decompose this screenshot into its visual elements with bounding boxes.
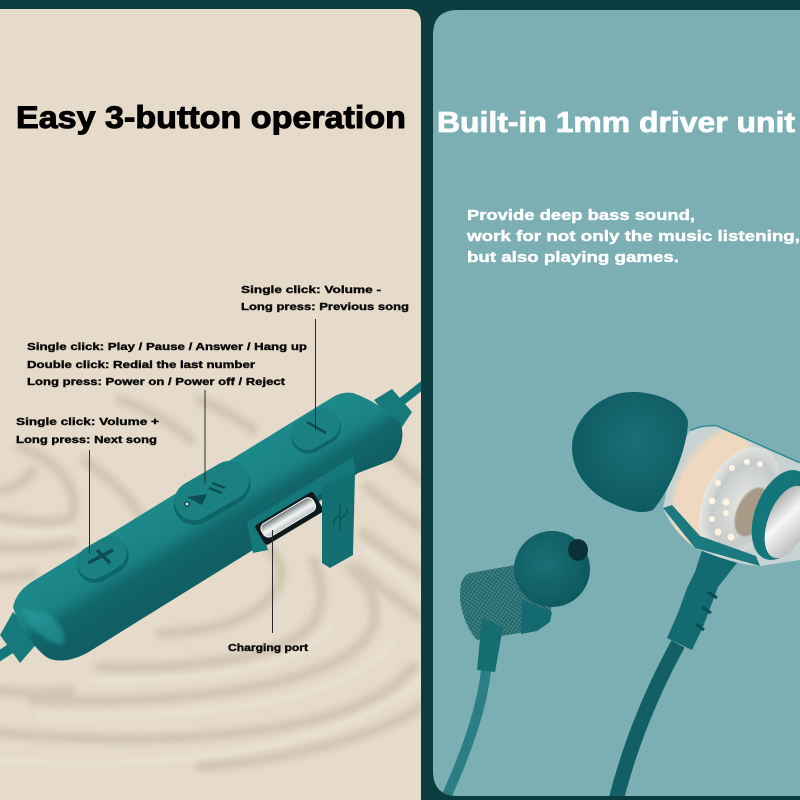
label: volume up: Long press: Next song	[16, 434, 157, 446]
ear tip hole	[568, 539, 588, 561]
small earphone	[447, 531, 590, 795]
strain relief ridges	[696, 592, 717, 630]
small ear tip	[514, 531, 590, 607]
label: volume down	[241, 284, 409, 313]
strain relief	[667, 547, 737, 650]
description	[466, 207, 800, 266]
label: play pause: Double click: Redial the last number	[27, 359, 255, 371]
button: play pause	[174, 460, 250, 525]
description: but also playing games.	[467, 249, 679, 266]
title: Easy 3-button operation	[16, 99, 406, 135]
large earphone	[572, 392, 800, 800]
large cable	[616, 644, 678, 800]
panel: driver unit	[433, 10, 800, 800]
USB cover tab	[322, 472, 355, 568]
button: minus	[291, 408, 341, 454]
leader line: volume up	[89, 450, 90, 554]
panel: 3-button operation	[0, 9, 424, 800]
leader line: charging port	[272, 530, 273, 633]
meshed body	[460, 565, 552, 640]
cable: left	[0, 645, 13, 662]
end cap rim	[752, 470, 800, 560]
peach coil	[670, 430, 752, 548]
label: charging port: Charging port	[228, 642, 309, 654]
small strain relief	[477, 618, 503, 672]
title: Built-in 1mm driver unit	[437, 107, 795, 139]
label: volume up: Single click: Volume +	[16, 416, 159, 428]
lit end highlight	[20, 608, 64, 645]
leader line: play pause	[204, 390, 206, 484]
label: play pause: Single click: Play / Pause / Answer / Hang up	[27, 341, 307, 353]
glowing dots	[708, 459, 763, 540]
large ear tip	[572, 392, 688, 512]
remote body	[13, 393, 402, 661]
cable collars	[0, 389, 412, 663]
small cable	[447, 670, 486, 795]
cable: right	[400, 381, 421, 404]
neck	[521, 600, 552, 634]
label: volume down: Single click: Volume -	[241, 284, 382, 296]
remote control	[0, 384, 424, 663]
button: plus	[77, 536, 129, 583]
transparent driver housing	[663, 425, 800, 566]
dark bottom edge	[663, 505, 760, 566]
housing top edge	[690, 425, 800, 462]
silver end disc	[764, 486, 800, 558]
silver cylinder	[699, 447, 780, 557]
sand ripple background	[0, 400, 421, 767]
micro USB port	[254, 491, 324, 546]
label: play pause: Long press: Power on / Power off / Reject	[27, 376, 286, 388]
description: Provide deep bass sound,	[467, 207, 695, 224]
leader line: volume down	[315, 319, 316, 431]
label: volume down: Long press: Previous song	[241, 301, 409, 313]
label: play pause	[27, 341, 307, 388]
charging port frame	[247, 457, 356, 553]
label: volume up	[16, 416, 159, 446]
description: work for not only the music listening,	[466, 228, 800, 245]
inner cone	[734, 486, 765, 537]
